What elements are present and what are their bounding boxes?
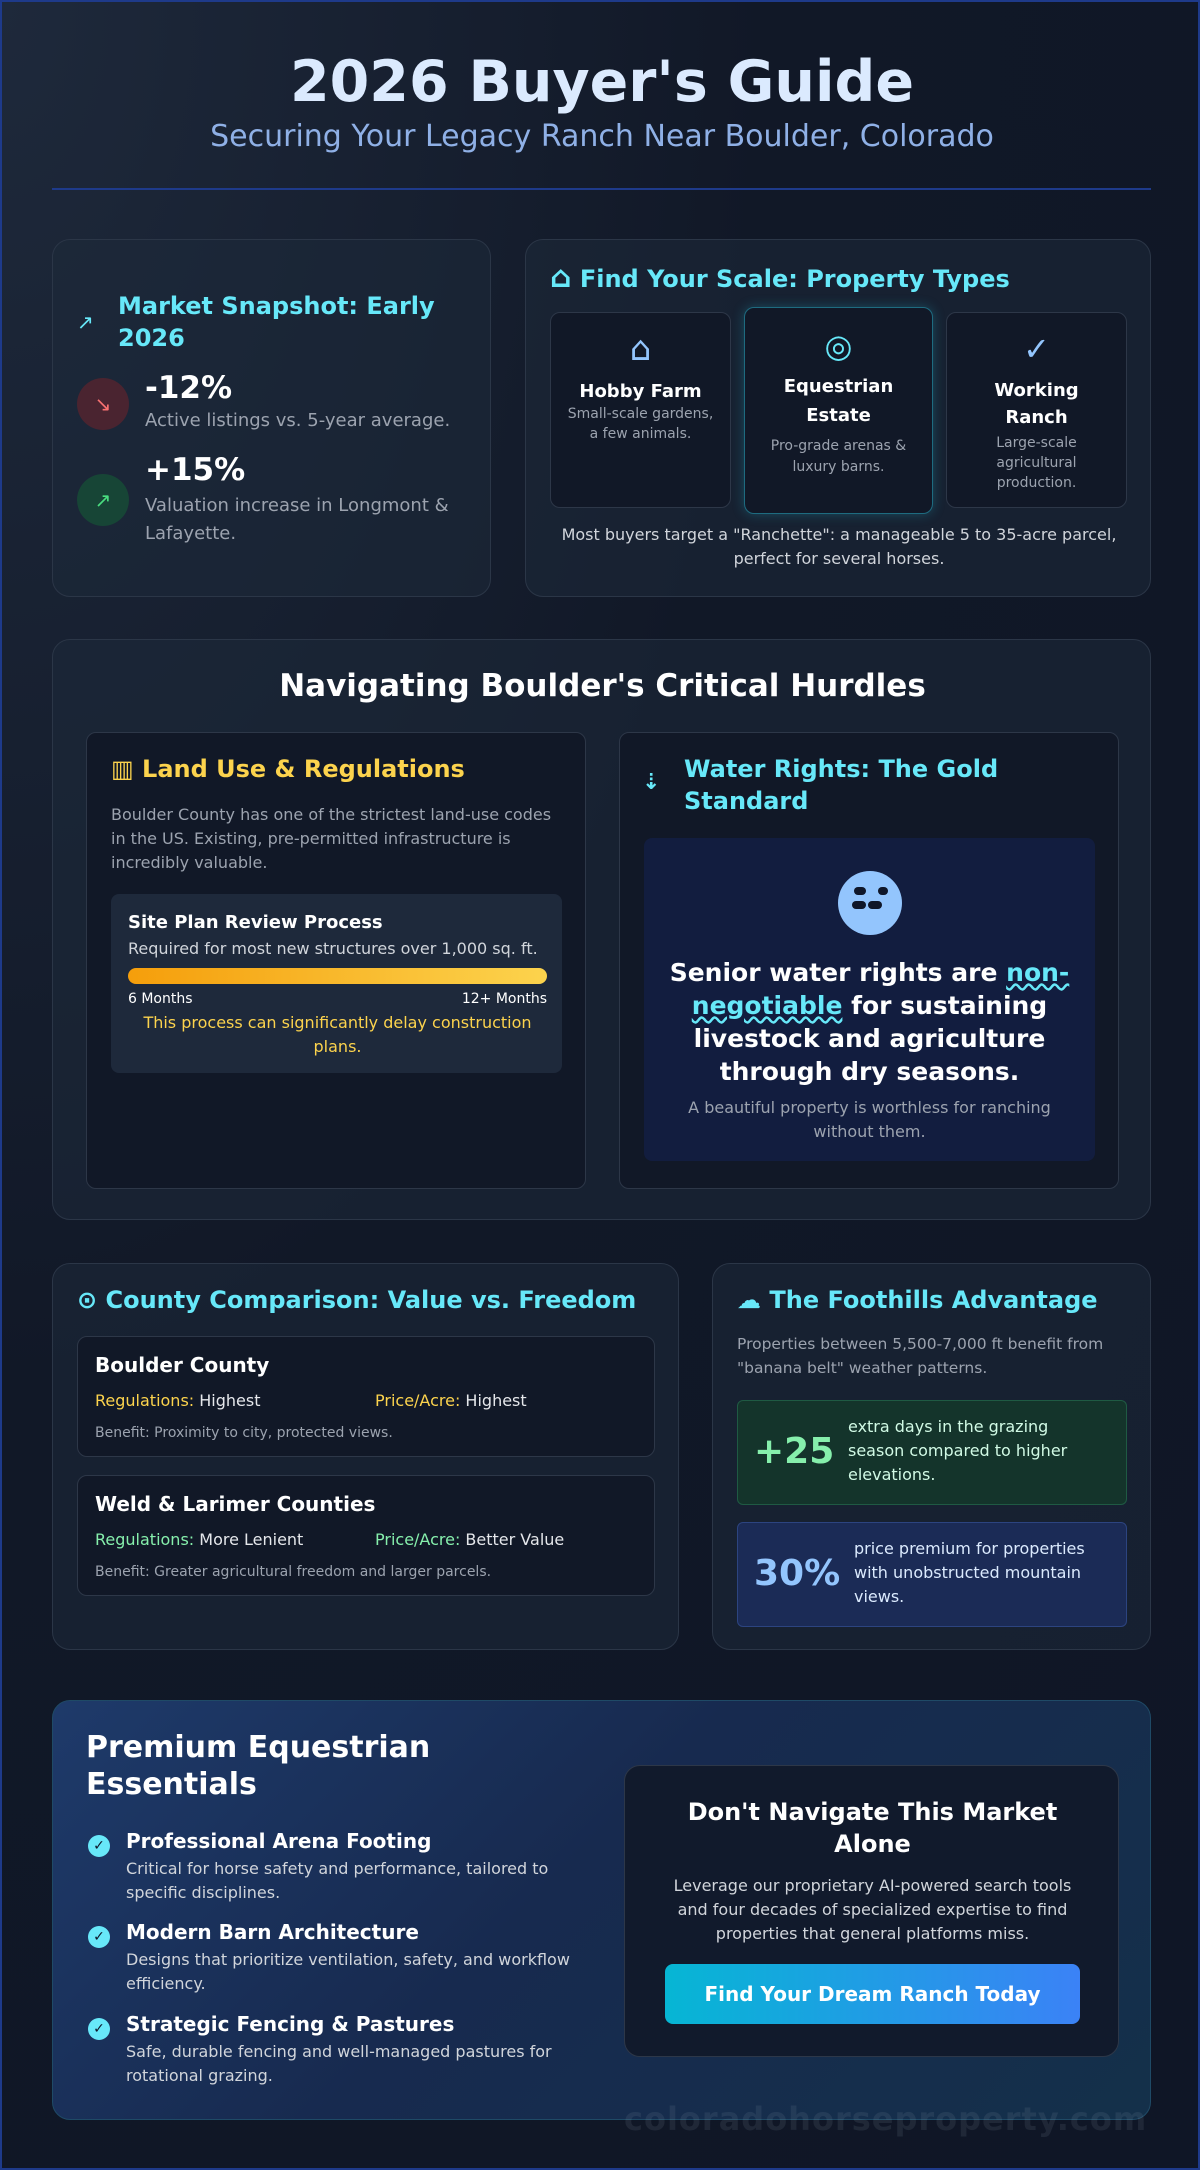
stat: +15%: +15% xyxy=(145,452,245,488)
card: working ranch: Ranch xyxy=(1005,407,1068,428)
box: site plan review xyxy=(111,894,562,1073)
watermark: coloradohorseproperty.com xyxy=(624,2100,1147,2138)
stat: -12%: ↘ xyxy=(95,392,111,416)
card: working ranch: Working xyxy=(994,380,1079,401)
card: working ranch: Large-scale xyxy=(996,435,1077,451)
card: equestrian estate xyxy=(744,307,933,514)
item: barn architecture xyxy=(88,1920,570,1993)
card: weld & larimer: Benefit: Greater agricultural freedom and larger parcels. xyxy=(95,1564,491,1580)
card: boulder county xyxy=(77,1336,655,1457)
card: weld & larimer: Regulations: More Lenient xyxy=(95,1530,303,1549)
stat: 30%: 30% xyxy=(754,1553,840,1594)
bar: timeline xyxy=(128,968,547,984)
heading: premium essentials: Premium Equestrian xyxy=(86,1730,430,1765)
box: site plan review: Required for most new structures over 1,000 sq. ft. xyxy=(128,939,538,958)
card: boulder county: Price/Acre: Highest xyxy=(375,1391,527,1410)
icon: trend up: ↗ xyxy=(77,310,94,334)
list: essentials: Modern Barn Architecture xyxy=(126,1920,419,1944)
list: essentials: Strategic Fencing & Pastures xyxy=(126,2012,454,2036)
stat: +25 xyxy=(737,1400,1127,1505)
box: site plan review: 12+ Months xyxy=(462,991,547,1007)
stat: +15%: ↗ xyxy=(95,488,111,512)
box: water callout: A beautiful property is worthless for ranching without them. xyxy=(688,1098,1051,1141)
box: site plan review: Site Plan Review Process xyxy=(128,912,383,933)
heading: county comparison: ⊙ County Comparison: Value vs. Freedom xyxy=(77,1286,636,1314)
callout: cta: Alone xyxy=(834,1830,911,1858)
list: essentials: ✓ xyxy=(93,1838,105,1854)
card: water rights xyxy=(619,732,1119,1189)
card: equestrian estate: luxury barns. xyxy=(792,459,884,475)
text: ranchette note: Most buyers target a "Ranchette": a manageable 5 to 35-acre parcel, perfect for several horses. xyxy=(562,525,1116,568)
card: hobby farm: ⌂ xyxy=(630,329,651,369)
card: equestrian estate: Pro-grade arenas & xyxy=(771,438,906,454)
list: essentials: Safe, durable fencing and well-managed pastures for rotational grazing. xyxy=(126,2042,552,2085)
card: hobby farm: a few animals. xyxy=(590,426,691,442)
callout: cta xyxy=(624,1765,1119,2057)
list: essentials: Professional Arena Footing xyxy=(126,1829,431,1853)
card: boulder county: Regulations: Highest xyxy=(95,1391,260,1410)
stat: 30% xyxy=(737,1522,1127,1627)
heading: water rights: Water Rights: The Gold Standard xyxy=(684,755,998,815)
stat: -12%: Active listings vs. 5-year average. xyxy=(145,410,450,431)
heading: water rights: ⇣ xyxy=(642,770,660,795)
card: hobby farm: Small-scale gardens, xyxy=(568,406,713,422)
card: weld & larimer: Weld & Larimer Counties xyxy=(95,1492,375,1516)
card: equestrian estate: Equestrian xyxy=(784,376,893,397)
stat: -12%: -12% xyxy=(145,370,232,406)
box: site plan review: 6 Months xyxy=(128,991,193,1007)
card: weld & larimer xyxy=(77,1475,655,1596)
card: hobby farm xyxy=(550,312,731,508)
card: working ranch: ✓ xyxy=(1023,330,1050,368)
card: working ranch: agricultural xyxy=(996,455,1077,471)
heading: property types: ⌂ Find Your Scale: Property Types xyxy=(550,260,1010,295)
callout: cta: Leverage our proprietary AI-powered search tools and four decades of specialized expertise to find properties that general platforms miss. xyxy=(674,1876,1071,1943)
list: essentials: Designs that prioritize ventilation, safety, and workflow efficiency. xyxy=(126,1950,570,1993)
box: water callout xyxy=(644,838,1095,1161)
callout: cta: Don't Navigate This Market xyxy=(688,1798,1057,1826)
box: water callout: Senior water rights are non-negotiable for sustaining livestock and agriculture through dry seasons. xyxy=(670,958,1069,1086)
heading: premium essentials xyxy=(86,1730,430,1802)
card: equestrian estate: ◎ xyxy=(825,327,852,365)
text: land use: Boulder County has one of the strictest land-use codes in the US. Existing, pre-permitted infrastructure is incredibly valuable. xyxy=(111,805,551,872)
heading: market snapshot: Market Snapshot: Early 2026 xyxy=(118,292,435,352)
text: foothills: Properties between 5,500-7,000 ft benefit from "banana belt" weather patterns. xyxy=(737,1335,1103,1377)
title: 2026 Buyer's Guide xyxy=(290,49,914,115)
list: essentials: ✓ xyxy=(93,2021,105,2037)
panel: market snapshot xyxy=(52,239,491,597)
card: boulder county: Boulder County xyxy=(95,1353,269,1377)
card: equestrian estate: Estate xyxy=(806,405,871,426)
list: essentials: Critical for horse safety and performance, tailored to specific disciplines. xyxy=(126,1859,548,1902)
button: cta xyxy=(665,1964,1080,2024)
card: working ranch xyxy=(946,312,1127,508)
stat: +15%: Valuation increase in Longmont & Lafayette. xyxy=(145,495,449,544)
card: hobby farm: Hobby Farm xyxy=(579,381,702,402)
panel: foothills advantage xyxy=(712,1263,1151,1650)
heading: foothills: ☁ The Foothills Advantage xyxy=(737,1286,1098,1314)
stat: +15% xyxy=(77,452,449,544)
icon: water xyxy=(838,871,902,935)
item: fencing xyxy=(88,2012,552,2085)
item: arena footing xyxy=(88,1829,548,1902)
stat: -12% xyxy=(77,370,450,431)
card: weld & larimer: Price/Acre: Better Value xyxy=(375,1530,564,1549)
stat: +25: extra days in the grazing season compared to higher elevations. xyxy=(848,1417,1067,1484)
card: working ranch: production. xyxy=(997,475,1076,491)
heading: land use: ▥ Land Use & Regulations xyxy=(111,755,465,783)
subtitle: Securing Your Legacy Ranch Near Boulder, Colorado xyxy=(210,119,994,154)
panel: premium essentials xyxy=(52,1700,1151,2120)
card: land use xyxy=(86,732,586,1189)
button: cta: Find Your Dream Ranch Today xyxy=(705,1982,1040,2006)
list: essentials xyxy=(88,1829,570,2085)
stat: +25: +25 xyxy=(754,1431,834,1472)
stat: 30%: price premium for properties with unobstructed mountain views. xyxy=(854,1539,1085,1606)
heading: premium essentials: Essentials xyxy=(86,1767,257,1802)
card: boulder county: Benefit: Proximity to city, protected views. xyxy=(95,1425,393,1441)
panel: county comparison xyxy=(52,1263,679,1650)
panel: property types xyxy=(525,239,1151,597)
box: site plan review: This process can significantly delay construction plans. xyxy=(143,1013,532,1056)
panel: critical hurdles xyxy=(52,639,1151,1220)
list: essentials: ✓ xyxy=(93,1929,105,1945)
heading: hurdles: Navigating Boulder's Critical Hurdles xyxy=(279,668,926,704)
